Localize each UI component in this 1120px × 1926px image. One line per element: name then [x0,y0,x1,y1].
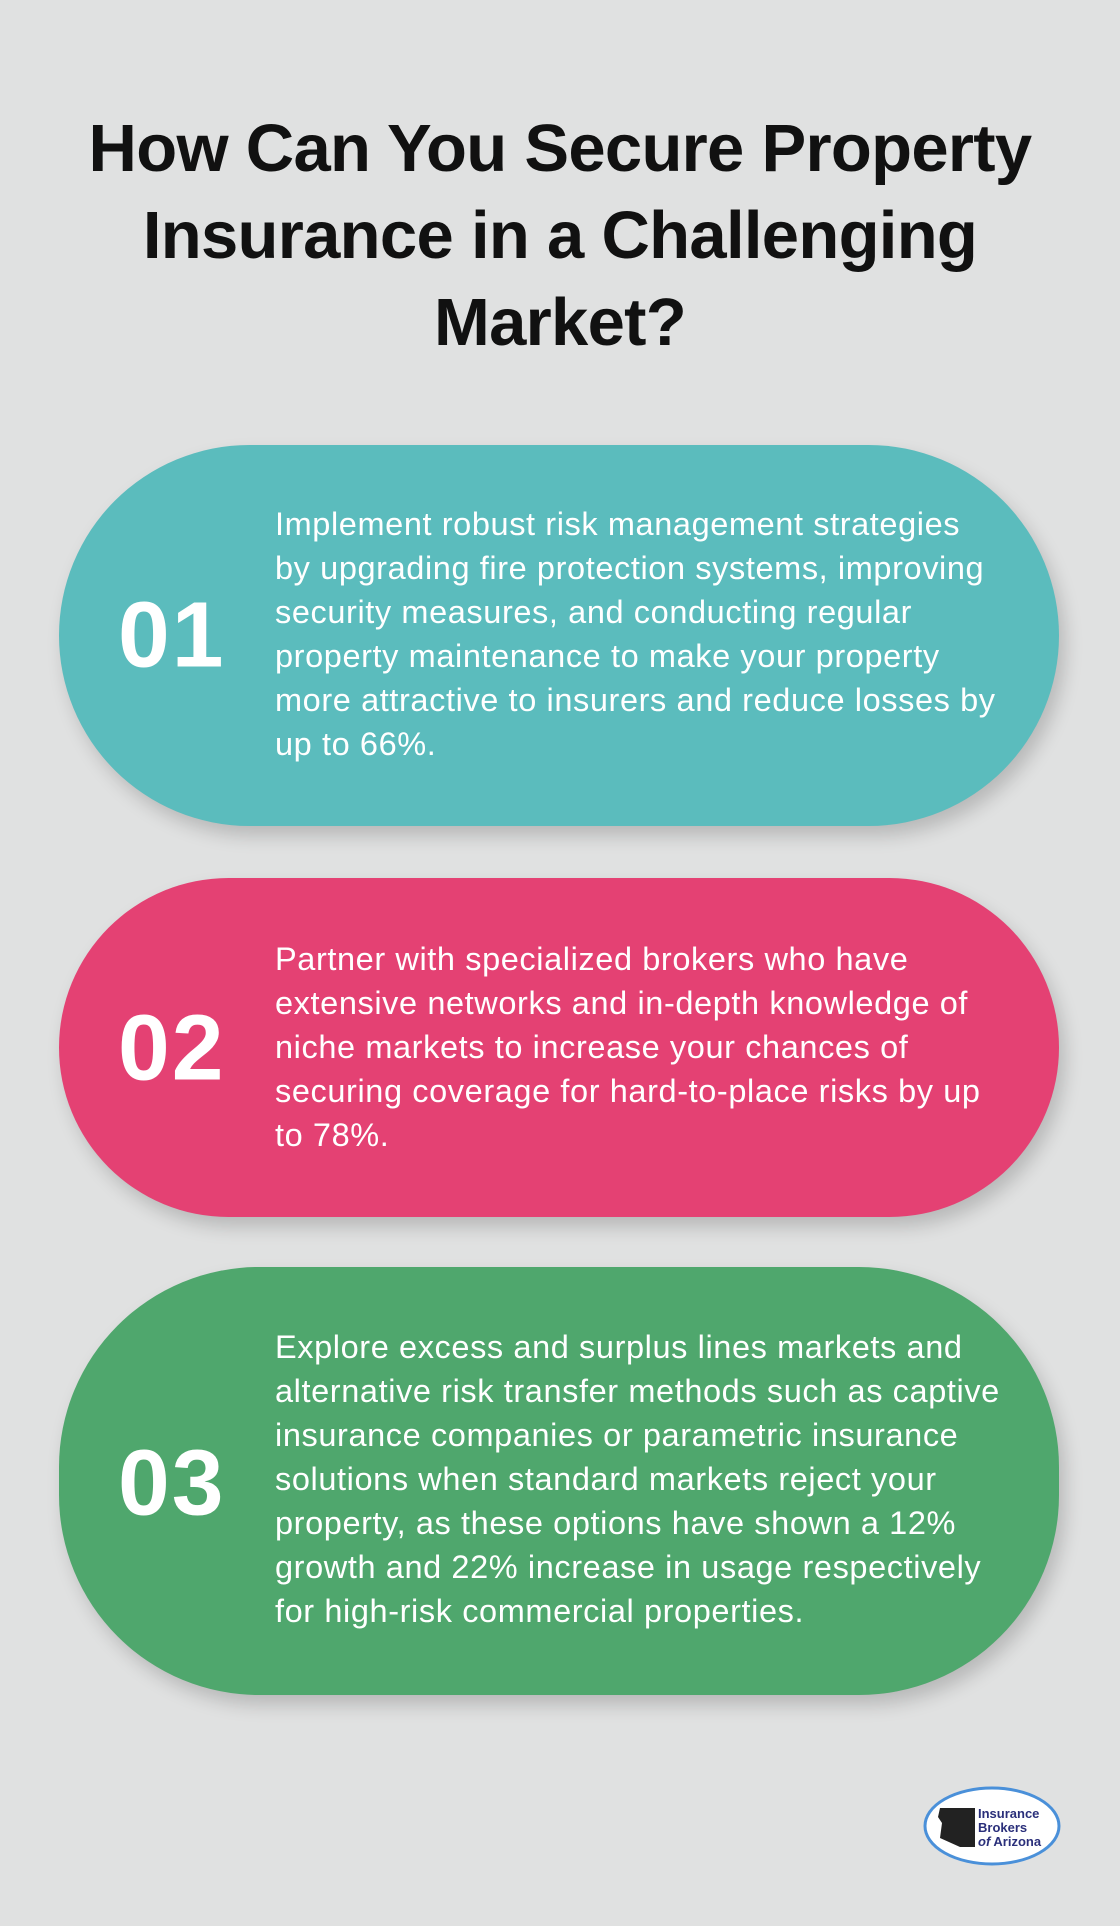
text 01: property maintenance to make your property [275,638,940,674]
text 02: extensive networks and in-depth knowledge of [275,985,968,1021]
text 03 [275,1329,1000,1629]
text 01: up to 66%. [275,726,436,762]
title: Market? [434,285,686,360]
title: How Can You Secure Property [89,111,1031,186]
text 01 [275,506,996,762]
text 03: insurance companies or parametric insurance [275,1417,958,1453]
logo: Brokers [978,1820,1027,1835]
text 03: growth and 22% increase in usage respectively [275,1549,981,1585]
text 03: alternative risk transfer methods such as captive [275,1373,1000,1409]
number 02: 02 [118,996,225,1100]
logo [924,1786,1060,1866]
number 03: 03 [118,1430,225,1534]
text 02: to 78%. [275,1117,389,1153]
number 01: 01 [118,582,225,686]
text 01: Implement robust risk management strategies [275,506,960,542]
text 01: more attractive to insurers and reduce losses by [275,682,996,718]
text 02: Partner with specialized brokers who have [275,941,908,977]
text 02 [275,941,981,1153]
text 02: securing coverage for hard-to-place risks by up [275,1073,981,1109]
panel: step 03 [59,1267,1059,1695]
logo: of Arizona [978,1834,1042,1849]
text 01: security measures, and conducting regular [275,594,912,630]
text 03: Explore excess and surplus lines markets and [275,1329,963,1365]
panel: step 01 [59,445,1059,826]
text 02: niche markets to increase your chances of [275,1029,908,1065]
text 01: by upgrading fire protection systems, improving [275,550,984,586]
title: Insurance in a Challenging [143,198,977,273]
text 03: solutions when standard markets reject your [275,1461,937,1497]
title [89,111,1032,360]
text 03: property, as these options have shown a 12% [275,1505,956,1541]
panel: step 02 [59,878,1059,1217]
text 03: for high-risk commercial properties. [275,1593,804,1629]
logo: Insurance [978,1806,1039,1821]
